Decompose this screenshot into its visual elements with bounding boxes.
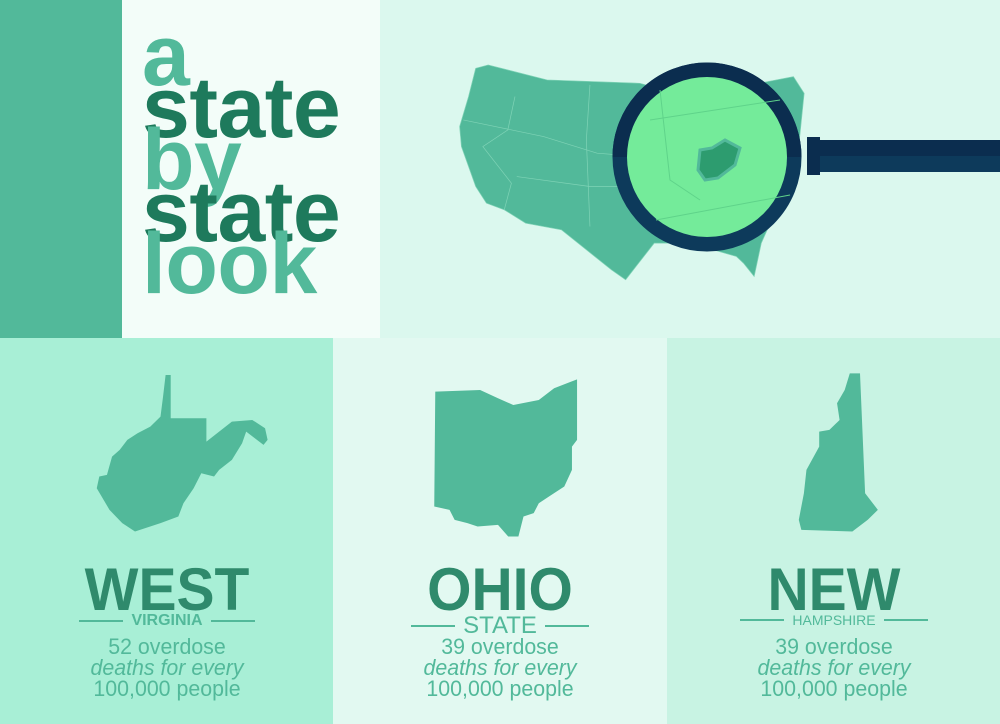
panel: Ohio: deaths for every	[423, 655, 577, 680]
title	[142, 8, 340, 312]
icon: NH shape	[798, 373, 878, 532]
West Virginia highlight	[698, 140, 740, 180]
title: look	[142, 216, 317, 312]
panel: New Hampshire	[667, 338, 1000, 724]
panel: New Hampshire: 39 overdose	[775, 634, 893, 659]
title: state	[142, 164, 340, 260]
panel: New Hampshire: deaths for every	[757, 655, 911, 680]
magnifier	[620, 70, 1000, 244]
panel: New Hampshire: NEW	[768, 556, 900, 623]
panel: Ohio: 100,000 people	[426, 676, 574, 701]
title: state	[142, 60, 340, 156]
title: a	[142, 8, 189, 104]
left bar	[0, 0, 122, 338]
panel: West Virginia: 100,000 people	[93, 676, 241, 701]
panel: New Hampshire: 100,000 people	[760, 676, 908, 701]
panel: New Hampshire: HAMPSHIRE	[792, 612, 876, 628]
icon: WV shape	[96, 375, 268, 532]
panel: West Virginia: deaths for every	[90, 655, 244, 680]
title panel	[122, 0, 380, 338]
panel: Ohio: 39 overdose	[441, 634, 559, 659]
panel: Ohio: STATE	[463, 612, 537, 639]
title: by	[142, 112, 241, 208]
panel: West Virginia: WEST	[85, 556, 249, 623]
US map	[460, 65, 804, 280]
map with magnifier	[459, 62, 1000, 280]
panel: Ohio: OHIO	[427, 556, 573, 623]
panel: West Virginia	[0, 338, 334, 724]
panel: Ohio	[333, 338, 667, 724]
panel: West Virginia: 52 overdose	[108, 634, 226, 659]
icon: Ohio shape	[434, 380, 578, 536]
panel: West Virginia: VIRGINIA	[131, 612, 203, 629]
